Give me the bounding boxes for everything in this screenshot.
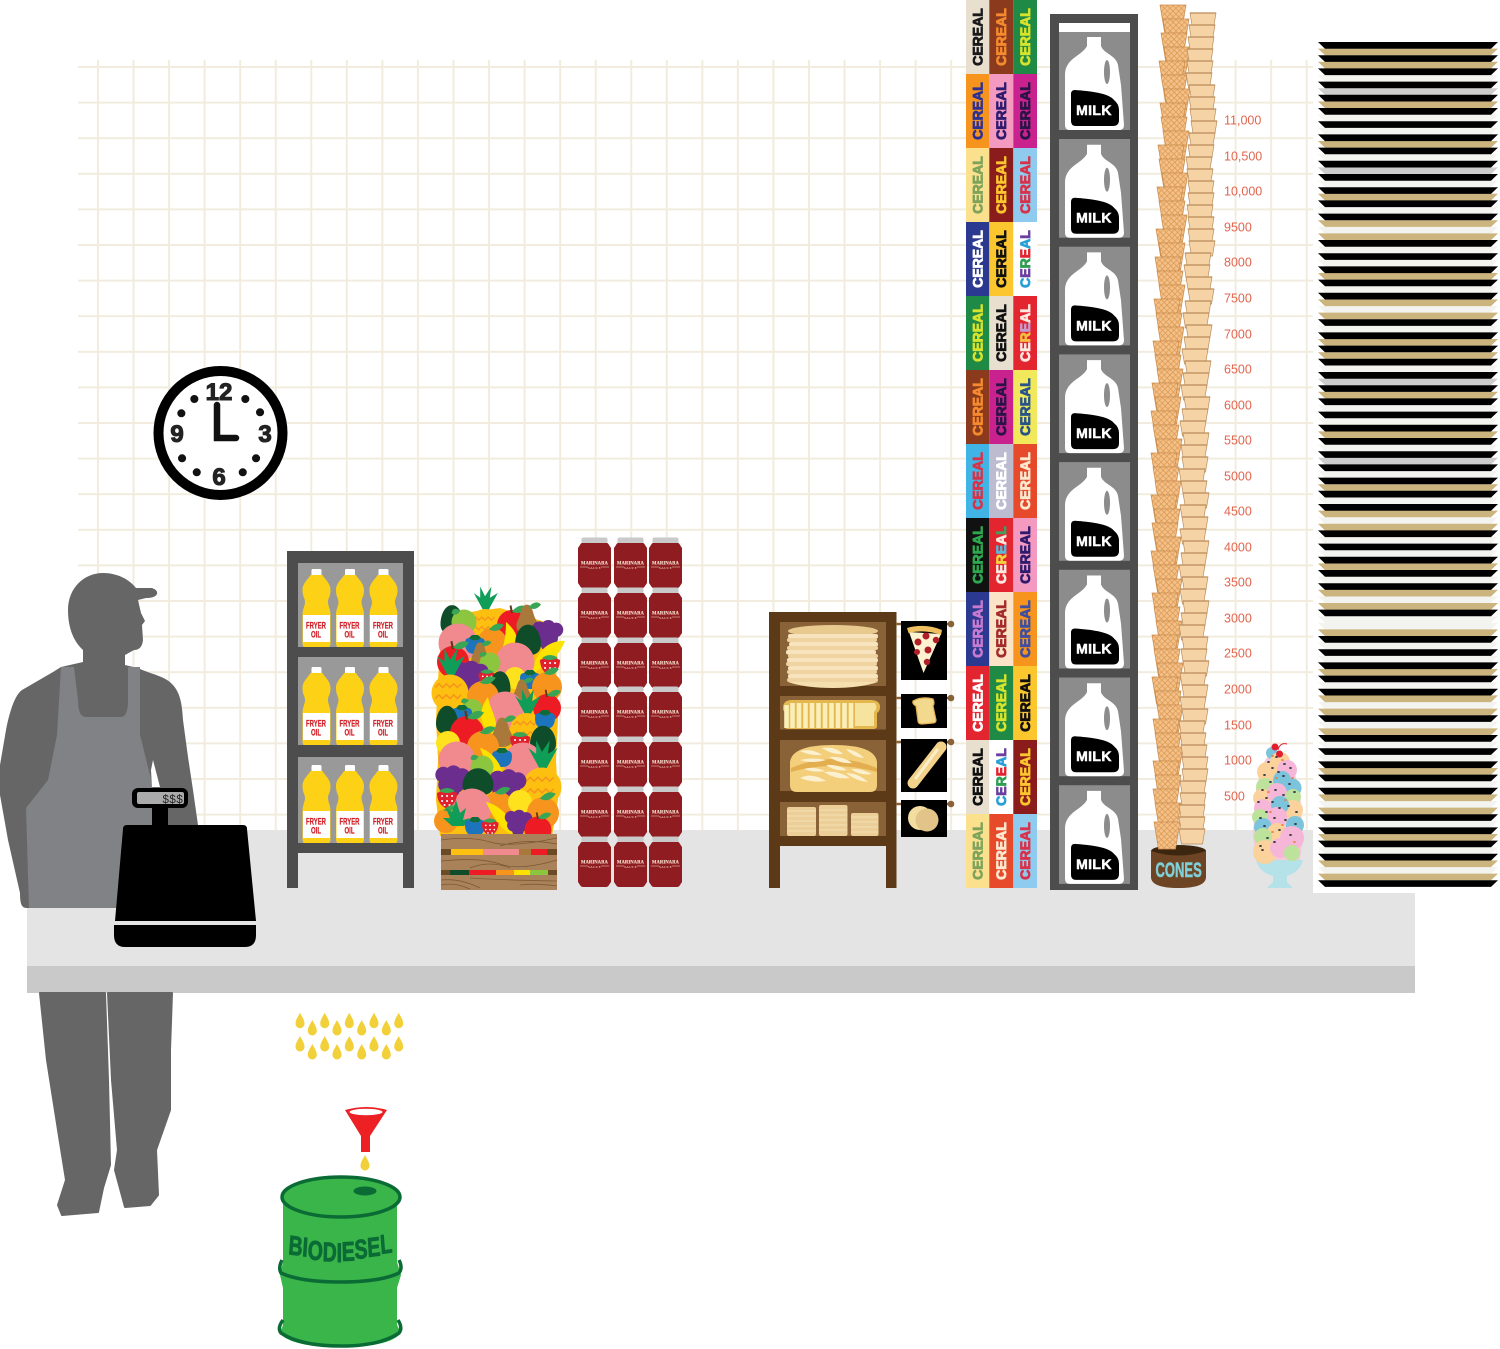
row 7: CEREAL	[1017, 452, 1033, 510]
axis labels: 6000	[1224, 398, 1252, 412]
axis labels: 2500	[1224, 646, 1252, 660]
row 1	[966, 0, 1037, 74]
waffle cone stack	[1151, 5, 1190, 849]
row 8: CEREAL	[993, 526, 1009, 584]
marinara sauce jars: SAUCE	[624, 865, 637, 869]
sugar cone stack	[1179, 13, 1217, 844]
cereal boxes column	[966, 0, 1037, 888]
marinara sauce jars: MARINARA	[617, 860, 644, 866]
shelf: fryer oil: OIL	[378, 826, 388, 836]
biodiesel barrel	[279, 1177, 401, 1347]
shelf: milk jugs: MILK	[1076, 210, 1112, 226]
row 8: CEREAL	[1017, 526, 1033, 584]
clock: 12	[206, 379, 232, 406]
shelf: fryer oil: OIL	[378, 630, 388, 640]
marinara sauce jars: MARINARA	[652, 710, 679, 716]
background grid	[78, 60, 1313, 830]
row 9: CEREAL	[1017, 600, 1033, 658]
cash register: $$$	[162, 794, 183, 807]
axis labels: 10,000	[1224, 184, 1262, 198]
marinara sauce jars: SAUCE	[588, 865, 601, 869]
person: upper body	[0, 573, 198, 908]
shelf: fryer oil: OIL	[311, 630, 321, 640]
can opening	[1151, 845, 1206, 857]
row 4: CEREAL	[970, 230, 986, 288]
marinara sauce jars: SAUCE	[588, 616, 601, 620]
tan wafers	[1318, 49, 1498, 880]
marinara sauce jars: MARINARA	[652, 860, 679, 866]
marinara sauce jars: MARINARA	[581, 610, 608, 616]
marinara sauce jars: MARINARA	[617, 760, 644, 766]
counter	[27, 830, 1415, 993]
axis labels: 4000	[1224, 540, 1252, 554]
marinara sauce jars: MARINARA	[652, 610, 679, 616]
bread shelf	[769, 612, 896, 888]
axis labels: 3500	[1224, 576, 1252, 590]
row 7: CEREAL	[970, 452, 986, 510]
axis labels: 10,500	[1224, 150, 1262, 164]
shelf: fryer oil: FRYER	[373, 816, 393, 828]
axis labels: 5500	[1224, 434, 1252, 448]
axis labels: 9500	[1224, 220, 1252, 234]
axis labels: 3000	[1224, 612, 1252, 626]
row 5	[966, 296, 1037, 370]
row 5: CEREAL	[993, 304, 1009, 362]
black wafers	[1318, 42, 1498, 887]
marinara sauce jars: SAUCE	[588, 765, 601, 769]
fruit crate	[441, 834, 557, 890]
row 11	[966, 740, 1037, 814]
row 6: CEREAL	[970, 378, 986, 436]
shelf: fryer oil: OIL	[344, 728, 355, 738]
shelf: fryer oil: FRYER	[373, 718, 393, 730]
oil drops	[296, 1013, 403, 1060]
marinara sauce jars: MARINARA	[581, 560, 608, 566]
sign: pizza	[896, 621, 954, 804]
shelf: fryer oil: OIL	[311, 728, 321, 738]
grey wafers	[1318, 88, 1498, 464]
marinara sauce jars: SAUCE	[588, 666, 601, 670]
row 10: CEREAL	[970, 674, 986, 732]
marinara sauce jars: SAUCE	[659, 765, 672, 769]
marinara sauce jars: MARINARA	[617, 810, 644, 816]
marinara sauce jars: MARINARA	[652, 810, 679, 816]
ciabatta loaves	[790, 745, 877, 792]
axis labels: 6500	[1224, 362, 1252, 376]
shelf: fryer oil	[287, 551, 414, 888]
row 1: CEREAL	[1017, 8, 1033, 66]
row 8: CEREAL	[970, 526, 986, 584]
row 8	[966, 518, 1037, 592]
row 10: CEREAL	[1017, 674, 1033, 732]
wafer stack panel	[1313, 38, 1500, 893]
shelf: fryer oil: OIL	[344, 826, 355, 836]
row 11: CEREAL	[993, 748, 1009, 806]
shelf: milk jugs: MILK	[1076, 748, 1112, 764]
marinara sauce jars: MARINARA	[617, 710, 644, 716]
sign: baguette	[901, 739, 954, 792]
marinara sauce jars: MARINARA	[617, 610, 644, 616]
marinara sauce jars: MARINARA	[617, 560, 644, 566]
row 12	[966, 814, 1037, 888]
shelf: milk jugs: MILK	[1076, 102, 1112, 118]
dough ball stacks	[787, 805, 878, 836]
marinara sauce jars: SAUCE	[659, 616, 672, 620]
row 1: CEREAL	[970, 8, 986, 66]
row 3: CEREAL	[970, 156, 986, 214]
row 2: CEREAL	[1017, 82, 1033, 140]
biodiesel barrel: BIODIESEL	[288, 1228, 393, 1268]
row 7	[966, 444, 1037, 518]
marinara sauce jars: MARINARA	[617, 660, 644, 666]
marinara sauce jars: SAUCE	[659, 566, 672, 570]
row 7: CEREAL	[993, 452, 1009, 510]
row 2: CEREAL	[993, 82, 1009, 140]
axis labels: 11,000	[1224, 114, 1261, 128]
cones can: CONES	[1156, 858, 1202, 882]
marinara sauce jars: MARINARA	[652, 560, 679, 566]
marinara sauce jars: MARINARA	[652, 760, 679, 766]
row 1: CEREAL	[993, 8, 1009, 66]
axis labels: 8000	[1224, 256, 1252, 270]
row 6	[966, 370, 1037, 444]
axis labels: 1500	[1224, 718, 1252, 732]
row 9: CEREAL	[993, 600, 1009, 658]
sign: dough ball	[901, 800, 954, 837]
marinara sauce jars: MARINARA	[581, 810, 608, 816]
cash register	[114, 788, 256, 947]
axis labels: 7500	[1224, 292, 1252, 306]
marinara sauce jars: SAUCE	[588, 815, 601, 819]
shelf: milk jugs	[1050, 14, 1138, 890]
shelf: milk jugs: MILK	[1076, 425, 1112, 441]
marinara sauce jars: SAUCE	[588, 715, 601, 719]
marinara sauce jars	[578, 538, 682, 887]
marinara sauce jars: MARINARA	[581, 660, 608, 666]
white wafers	[1318, 75, 1498, 874]
marinara sauce jars: MARINARA	[652, 660, 679, 666]
shelf: fryer oil: FRYER	[340, 718, 360, 730]
clock: 6	[212, 464, 226, 491]
axis labels: 500	[1224, 790, 1245, 804]
marinara sauce jars: MARINARA	[581, 860, 608, 866]
row 4: CEREAL	[993, 230, 1009, 288]
shelf: milk jugs: MILK	[1076, 533, 1112, 549]
marinara sauce jars: MARINARA	[581, 710, 608, 716]
row 3	[966, 148, 1037, 222]
row 12: CEREAL	[993, 822, 1009, 880]
clock: 9	[170, 421, 184, 448]
row 6: CEREAL	[993, 378, 1009, 436]
shelf: fryer oil: OIL	[344, 630, 355, 640]
axis labels: 4500	[1224, 504, 1252, 518]
row 3: CEREAL	[1017, 156, 1033, 214]
person: legs	[40, 993, 172, 1215]
marinara sauce jars: MARINARA	[581, 760, 608, 766]
axis labels: 2000	[1224, 682, 1252, 696]
shelf: milk jugs: MILK	[1076, 856, 1112, 872]
row 4: CEREAL	[1017, 230, 1033, 288]
axis labels: 1000	[1224, 754, 1252, 768]
sliced bread loaf	[783, 700, 880, 729]
row 2: CEREAL	[970, 82, 986, 140]
axis labels: 7000	[1224, 328, 1252, 342]
marinara sauce jars: SAUCE	[659, 865, 672, 869]
row 2	[966, 74, 1037, 148]
row 9: CEREAL	[970, 600, 986, 658]
marinara sauce jars: SAUCE	[624, 666, 637, 670]
marinara sauce jars: SAUCE	[588, 566, 601, 570]
shelf: fryer oil: FRYER	[306, 718, 326, 730]
marinara sauce jars: SAUCE	[624, 566, 637, 570]
marinara sauce jars: SAUCE	[624, 715, 637, 719]
axis labels	[1224, 114, 1262, 804]
shelf: fryer oil: OIL	[378, 728, 388, 738]
row 12: CEREAL	[1017, 822, 1033, 880]
shelf: fryer oil: FRYER	[340, 816, 360, 828]
shelf: fryer oil: FRYER	[306, 816, 326, 828]
row 4	[966, 222, 1037, 296]
marinara sauce jars: SAUCE	[624, 815, 637, 819]
row 9	[966, 592, 1037, 666]
shelf: milk jugs: MILK	[1076, 640, 1112, 656]
row 5: CEREAL	[970, 304, 986, 362]
marinara sauce jars: SAUCE	[659, 815, 672, 819]
shelf: fryer oil: FRYER	[373, 620, 393, 632]
row 6: CEREAL	[1017, 378, 1033, 436]
row 11: CEREAL	[1017, 748, 1033, 806]
cones can	[1151, 851, 1206, 888]
clock: 3	[258, 421, 272, 448]
axis labels: 5000	[1224, 470, 1252, 484]
shelf: fryer oil: FRYER	[340, 620, 360, 632]
row 12: CEREAL	[970, 822, 986, 880]
shelf: fryer oil: FRYER	[306, 620, 326, 632]
pizza dough stack	[786, 625, 878, 688]
marinara sauce jars: SAUCE	[659, 666, 672, 670]
row 3: CEREAL	[993, 156, 1009, 214]
funnel	[345, 1107, 387, 1170]
clock	[158, 371, 282, 495]
shelf: fryer oil: OIL	[311, 826, 321, 836]
row 10: CEREAL	[993, 674, 1009, 732]
marinara sauce jars: SAUCE	[624, 616, 637, 620]
row 5: CEREAL	[1017, 304, 1033, 362]
row 11: CEREAL	[970, 748, 986, 806]
row 10	[966, 666, 1037, 740]
ice cream sundae	[1252, 744, 1304, 888]
marinara sauce jars: SAUCE	[624, 765, 637, 769]
shelf: milk jugs: MILK	[1076, 317, 1112, 333]
marinara sauce jars: SAUCE	[659, 715, 672, 719]
fruit pile	[432, 587, 565, 844]
sign: toast	[901, 694, 954, 728]
